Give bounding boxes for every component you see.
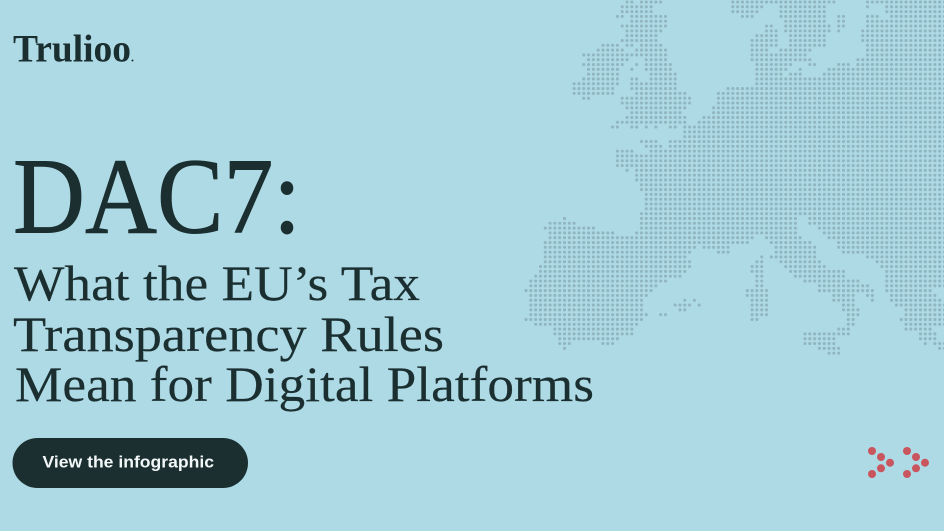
button: view the infographic: [12, 438, 248, 488]
icon: red dotted double arrow: [868, 447, 929, 478]
subtitle: Transparency Rules: [13, 306, 444, 362]
subtitle: Mean for Digital Platforms: [15, 356, 594, 412]
subtitle: [13, 255, 594, 412]
dotted map of Europe: [524, 2, 944, 353]
title: DAC7: DAC7:: [13, 138, 301, 257]
logo: Trulioo: Trulioo: [13, 28, 131, 70]
button: view the infographic: View the infographic: [42, 454, 214, 472]
subtitle: What the EU’s Tax: [14, 255, 420, 311]
